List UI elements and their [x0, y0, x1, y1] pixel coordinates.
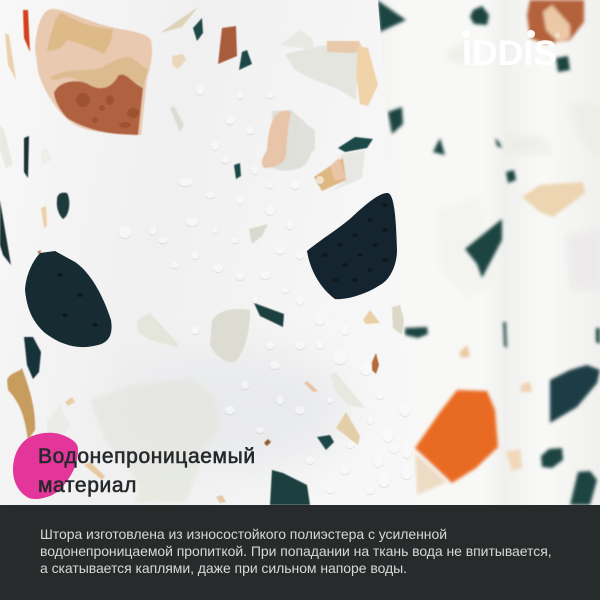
- large dark chip right with drops: [307, 193, 397, 299]
- description text: Штора изготовлена из износостойкого полиэстера с усиленной: [40, 526, 447, 542]
- pale blurred background chips: [435, 40, 600, 300]
- description text: а скатывается каплями, даже при сильном напоре воды.: [40, 560, 407, 576]
- far right curtain fold: [360, 0, 600, 505]
- large tan and terracotta chip: [35, 9, 152, 135]
- title: материал: [38, 474, 137, 497]
- curved beige and gray chip: [262, 30, 378, 192]
- title: [38, 445, 256, 497]
- near curtain panel: [0, 0, 417, 505]
- brown drops on terracotta: [76, 93, 139, 128]
- description text: водонепроницаемой пропиткой. При попадании на ткань вода не впитывается,: [40, 543, 552, 559]
- title: Водонепроницаемый: [38, 445, 256, 468]
- footer panel: [0, 505, 600, 600]
- dark drops on chips: [57, 203, 388, 327]
- logo: IDDIS: IDDIS: [462, 34, 557, 73]
- lower small chips: [7, 303, 404, 505]
- water drops: [119, 85, 413, 494]
- logo: IDDIS: ®: [555, 32, 561, 40]
- soft shadow on fabric: [110, 350, 350, 470]
- faint pale chips lower: [90, 378, 220, 503]
- small upper chips: [0, 7, 268, 265]
- blurred background terrazzo chips: [377, 0, 600, 505]
- large dark chip left: [25, 251, 112, 347]
- pink blob behind title: [13, 433, 78, 499]
- description text: [40, 526, 552, 576]
